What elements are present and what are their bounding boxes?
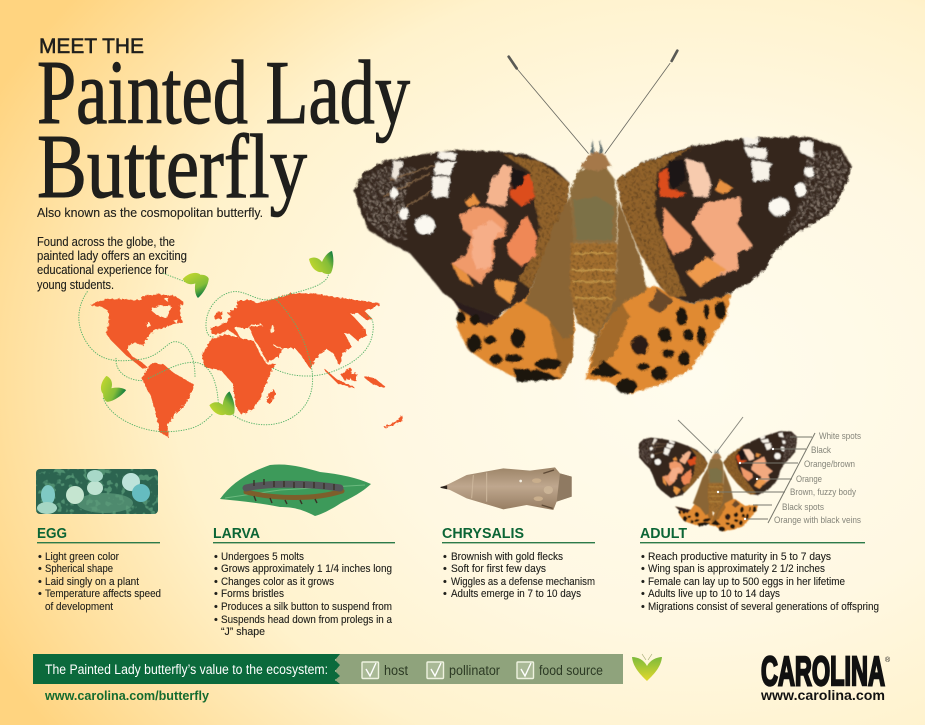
title: Painted Lady (37, 42, 410, 143)
panel: larva: “J” shape (221, 626, 265, 638)
panel: chrysalis: • (443, 551, 447, 563)
Carolina logo (760, 648, 891, 703)
adult anatomy labels (774, 431, 861, 526)
title: MEET THE (39, 35, 144, 58)
panel: adult: ADULT (640, 526, 687, 542)
panel: larva: • (214, 563, 218, 575)
intro text block: Found across the globe, the (37, 235, 175, 249)
panel: larva: • (214, 614, 218, 626)
checkbox: food source: food source (539, 663, 603, 678)
panel: egg: Light green color (45, 551, 119, 563)
icon: green butterfly north (178, 266, 211, 299)
panel: chrysalis: Soft for first few days (451, 563, 546, 575)
panel: larva: Produces a silk button to suspend from (221, 601, 392, 613)
panel: larva: LARVA (213, 526, 261, 542)
intro text block: young students. (37, 278, 114, 292)
panel: egg: Spherical shape (45, 563, 113, 575)
panel: chrysalis: • (443, 563, 447, 575)
panel: adult: • (641, 563, 645, 575)
panel: egg: • (38, 563, 42, 575)
subtitle: Also known as the cosmopolitan butterfly. (37, 206, 263, 220)
panel: larva: Forms bristles (221, 588, 284, 600)
panel: larva: Changes color as it grows (221, 576, 334, 588)
panel: adult: • (641, 588, 645, 600)
world migration map (79, 273, 402, 437)
panel: larva: • (214, 576, 218, 588)
intro text block (37, 235, 187, 292)
panel: egg: • (38, 588, 42, 600)
panel: chrysalis: • (443, 588, 447, 600)
intro text block: painted lady offers an exciting (37, 249, 187, 263)
panel: adult: Migrations consist of several generations of offspring (648, 601, 879, 613)
panel: chrysalis: Adults emerge in 7 to 10 days (451, 588, 581, 600)
panel: chrysalis: CHRYSALIS (442, 526, 524, 542)
website link: www.carolina.com/butterfly (44, 689, 209, 703)
adult anatomy labels: White spots (819, 431, 861, 442)
panel: adult: • (641, 576, 645, 588)
antennae (509, 51, 677, 153)
adult anatomy labels: Brown, fuzzy body (790, 487, 856, 498)
chrysalis photo (441, 467, 572, 510)
panel: egg: of development (45, 601, 113, 613)
panel: adult: Reach productive maturity in 5 to 7 days (648, 551, 831, 563)
panel: larva (213, 526, 395, 638)
icon: green butterfly banner (632, 654, 662, 681)
panel: egg: Laid singly on a plant (45, 576, 139, 588)
Carolina logo: www.carolina.com (760, 688, 885, 703)
panel: larva: • (214, 601, 218, 613)
checkbox: food source (517, 662, 603, 678)
title: Butterfly (37, 116, 307, 217)
panel: adult: Female can lay up to 500 eggs in her lifetime (648, 576, 845, 588)
panel: chrysalis: Brownish with gold flecks (451, 551, 563, 563)
panel: larva: Suspends head down from prolegs in a (221, 614, 393, 626)
Carolina logo: ® (885, 656, 891, 664)
panel: egg: Temperature affects speed (45, 588, 161, 600)
icon: green butterfly top (309, 251, 333, 274)
title (37, 35, 410, 217)
adult anatomy labels: Black spots (782, 502, 824, 513)
panel: adult (640, 526, 879, 613)
panel: larva: Undergoes 5 molts (221, 551, 304, 563)
panel: adult: • (641, 551, 645, 563)
Americas (92, 295, 193, 437)
adult anatomy labels: Orange/brown (804, 459, 855, 470)
larva photo: caterpillar on leaf (220, 465, 371, 516)
small labelled butterfly (626, 417, 815, 536)
panel: adult: Wing span is approximately 2 1/2 inches (648, 563, 825, 575)
ecosystem value banner: The Painted Lady butterfly’s value to the ecosystem: (45, 662, 328, 677)
main butterfly photo (354, 51, 852, 394)
panel: egg: • (38, 551, 42, 563)
icon: green butterfly west (94, 371, 127, 405)
adult anatomy labels: Black (811, 445, 831, 456)
panel: larva: Grows approximately 1 1/4 inches long (221, 563, 392, 575)
panel: egg: • (38, 576, 42, 588)
dotted migration routes (79, 273, 373, 432)
egg photo (36, 469, 158, 514)
Afro-Eurasia (202, 294, 402, 427)
panel: adult: • (641, 601, 645, 613)
checkbox: pollinator: pollinator (449, 663, 500, 678)
panel: chrysalis: • (443, 576, 447, 588)
adult anatomy labels: Orange with black veins (774, 515, 861, 526)
panel: larva: • (214, 588, 218, 600)
panel: egg: EGG (37, 526, 67, 542)
checkbox: host: host (384, 663, 408, 678)
panel: egg (37, 526, 161, 613)
icon: green butterfly south (207, 391, 237, 420)
adult anatomy labels: Orange (796, 474, 822, 485)
panel: larva: • (214, 551, 218, 563)
intro text block: educational experience for (37, 263, 168, 277)
checkbox: pollinator (427, 662, 500, 678)
panel: chrysalis (442, 526, 595, 600)
ecosystem value banner (33, 654, 623, 684)
checkbox: host (362, 662, 408, 678)
panel: chrysalis: Wiggles as a defense mechanism (451, 576, 595, 588)
panel: adult: Adults live up to 10 to 14 days (648, 588, 780, 600)
